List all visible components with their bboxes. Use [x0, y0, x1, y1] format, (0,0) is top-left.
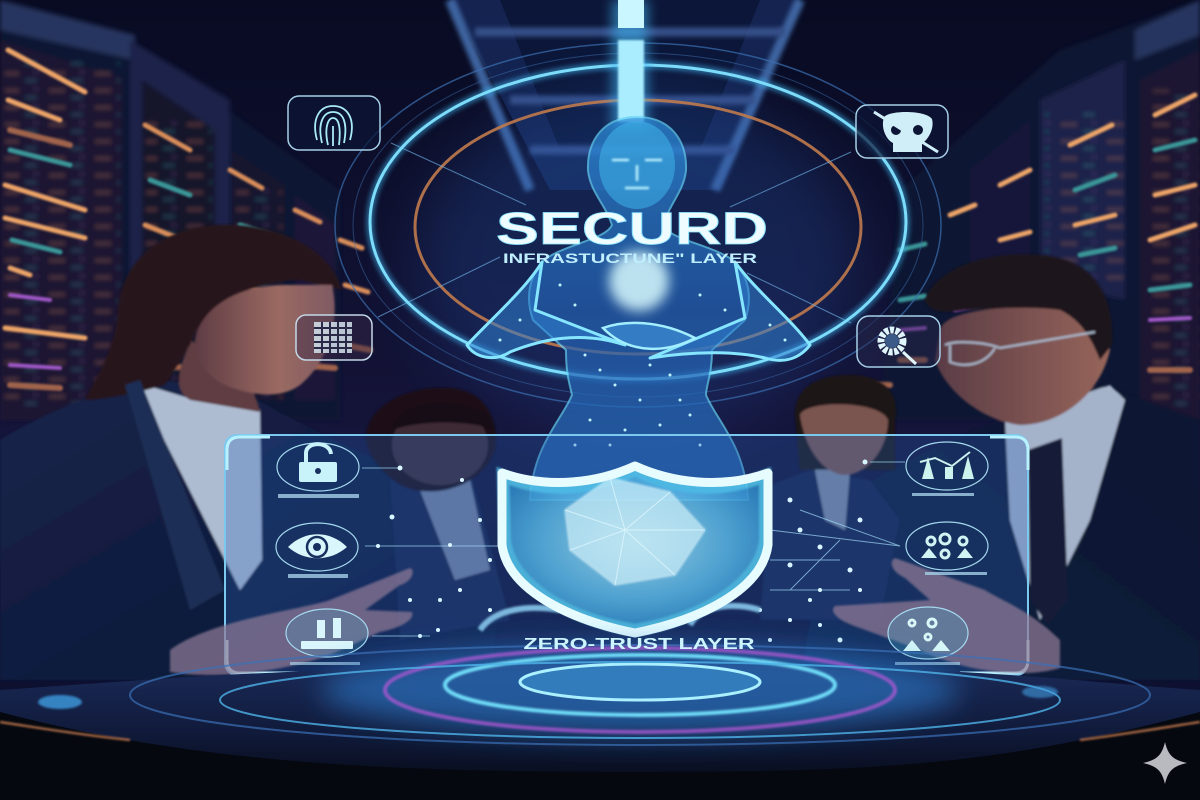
woman, left	[0, 225, 500, 680]
network of nodes	[362, 460, 905, 642]
hand	[603, 323, 695, 349]
panel icon: infrastructure	[286, 609, 368, 665]
holographic human figure	[467, 117, 810, 500]
panel icon: eye	[276, 523, 358, 578]
table	[0, 665, 1200, 800]
panel icon: gears and people	[906, 522, 988, 575]
colleague, back left	[366, 388, 510, 640]
body node points	[498, 284, 786, 446]
icon: gear	[857, 316, 940, 367]
chest glow	[609, 251, 669, 311]
holographic platform	[130, 645, 1150, 745]
panel icon: chart	[906, 442, 988, 496]
label: zero-trust layer: ZERO-TRUST LAYER	[524, 636, 755, 653]
main cyan ring	[370, 65, 906, 379]
light beam	[612, 0, 648, 130]
panel icon: padlock	[277, 443, 359, 498]
icon: fingerprint	[288, 96, 380, 150]
connector lines to icons	[378, 143, 851, 323]
crystal gem	[565, 478, 705, 585]
icon: QR code	[296, 315, 372, 360]
server racks left	[0, 0, 370, 420]
body	[529, 117, 749, 500]
hands	[170, 558, 1060, 675]
man, right	[800, 254, 1200, 680]
server racks right	[860, 0, 1200, 420]
face	[599, 121, 675, 209]
title: SECURD: SECURD	[496, 203, 768, 254]
ceiling with light structure	[450, 0, 800, 190]
panel icon: gears small	[888, 607, 968, 665]
arms	[467, 262, 625, 358]
shield	[502, 466, 768, 633]
colleague, back right	[760, 375, 900, 620]
hologram glow	[418, 90, 858, 430]
outer faint rings	[335, 43, 941, 407]
watermark star	[1143, 742, 1187, 784]
subtitle: infrastructure layer: INFRASTUCTUNE" LAYER	[503, 250, 757, 266]
icon: crossed skull	[856, 105, 948, 158]
table controls	[0, 686, 1200, 740]
glass panel	[225, 435, 1028, 675]
orange ring	[415, 100, 861, 354]
